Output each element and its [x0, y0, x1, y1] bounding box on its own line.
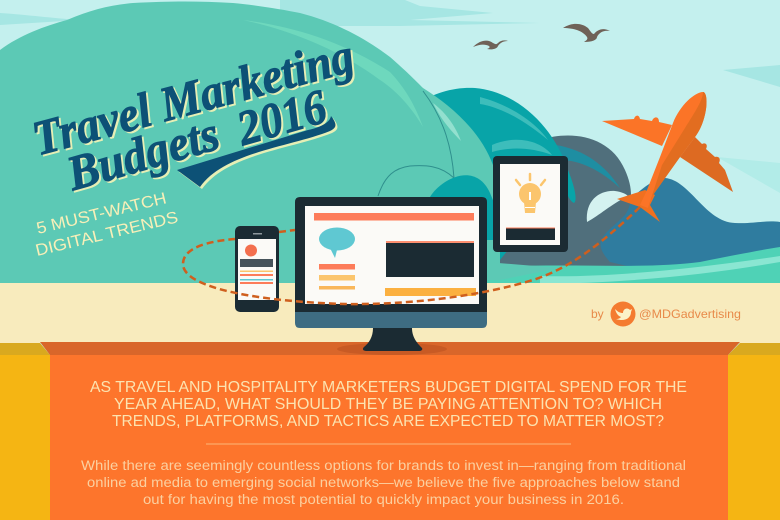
intro body: While there are seemingly countless options for brands to invest in—ranging from traditional — [81, 458, 686, 473]
fuselage — [640, 92, 707, 208]
left wing — [602, 116, 672, 146]
intro body: out for having the most potential to quickly impact your business in 2016. — [143, 492, 624, 507]
sand — [0, 283, 780, 343]
monitor stand — [363, 328, 422, 351]
birds — [473, 24, 610, 49]
byline — [591, 302, 741, 326]
curl inner — [430, 175, 495, 240]
yellow sides — [0, 343, 780, 520]
curl — [378, 91, 454, 196]
sky background — [0, 0, 780, 290]
background wave: deep teal — [400, 88, 576, 260]
airplane — [602, 92, 733, 222]
intro heading: AS TRAVEL AND HOSPITALITY MARKETERS BUDGET DIGITAL SPEND FOR THE — [90, 379, 687, 396]
intro body — [81, 458, 686, 507]
title: Budgets — [60, 105, 225, 201]
byline: by — [591, 307, 604, 321]
tablet — [493, 156, 568, 252]
phone — [235, 226, 279, 312]
wave hole — [587, 191, 628, 222]
byline: @MDGadvertising — [639, 307, 741, 321]
orange panel — [40, 342, 740, 520]
intro heading: YEAR AHEAD, WHAT SHOULD THEY BE PAYING ATTENTION TO? WHICH — [114, 396, 662, 413]
title swoosh — [177, 116, 337, 189]
icon: light bulb — [516, 174, 545, 213]
phone pie — [245, 244, 257, 256]
right wing — [680, 137, 733, 192]
divider — [206, 444, 571, 445]
background wave: slate — [500, 135, 665, 275]
subtitle: 5 MUST-WATCH — [35, 189, 168, 238]
icon: twitter — [610, 302, 636, 326]
main wave — [0, 2, 500, 290]
foreground foam wave — [400, 247, 780, 290]
monitor shadow — [337, 343, 447, 355]
bird large — [563, 24, 610, 42]
background wave: blue — [560, 178, 780, 275]
monitor — [295, 197, 487, 355]
title: 2016 — [230, 78, 333, 156]
tail — [617, 190, 660, 222]
tablet bar — [506, 228, 555, 240]
intro body: online ad media to emerging social networks—we believe the five approaches below stand — [87, 475, 680, 490]
speech bubble — [319, 228, 355, 258]
title: 2016 — [232, 80, 335, 158]
intro heading: TRENDS, PLATFORMS, AND TACTICS ARE EXPECTED TO MATTER MOST? — [112, 413, 664, 430]
dashed orbit: front — [183, 207, 640, 304]
subtitle — [34, 189, 180, 260]
dashed orbit: back — [279, 230, 295, 232]
title: Travel Marketing — [27, 28, 360, 166]
intro heading — [90, 379, 687, 430]
clouds — [0, 0, 780, 193]
bird small — [473, 40, 508, 49]
title: Budgets — [62, 107, 227, 203]
subtitle: DIGITAL TRENDS — [34, 208, 180, 260]
title: Travel Marketing — [29, 29, 362, 168]
